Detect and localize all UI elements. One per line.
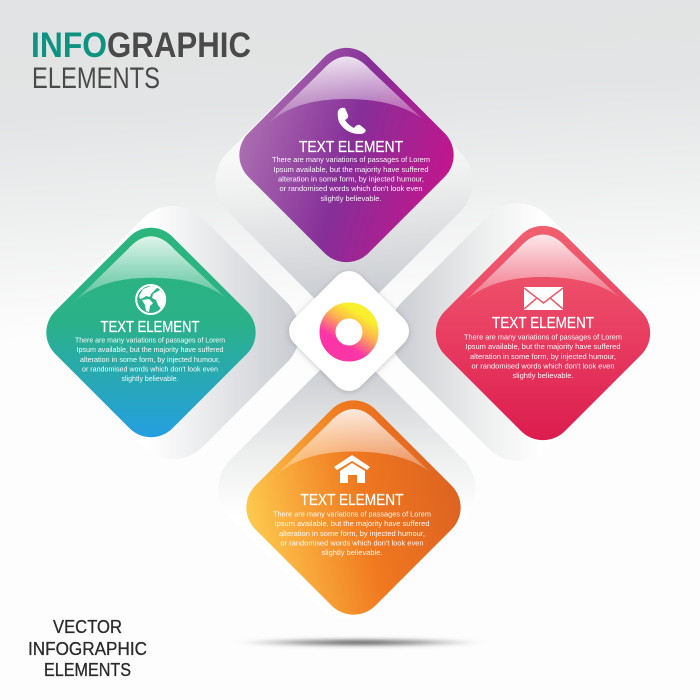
- icon: phone: [338, 108, 366, 134]
- panel: green globe card: alteration in some form, by injected humour,: [80, 357, 220, 364]
- panel: orange home card: or randomised words which don't look even: [280, 540, 424, 548]
- icon: globe: [136, 285, 165, 314]
- caption: vector infographic elements: ELEMENTS: [44, 660, 131, 680]
- panel: green globe card: or randomised words which don't look even: [82, 366, 218, 374]
- panel: orange home card: Ipsum available, but the majority have suffered: [274, 521, 430, 528]
- panel: top backing: [215, 53, 473, 311]
- panel: orange home card: [246, 400, 461, 615]
- caption: vector infographic elements: INFOGRAPHIC: [28, 639, 147, 659]
- icon: gradient ring: [328, 310, 370, 354]
- panel: orange home card: There are many variations of passages of Lorem: [273, 512, 431, 518]
- caption: vector infographic elements: VECTOR: [53, 617, 122, 637]
- panel: green globe card: TEXT ELEMENT: [100, 319, 200, 336]
- panel: purple phone card: TEXT ELEMENT: [299, 139, 403, 156]
- panel: red mail card: TEXT ELEMENT: [492, 315, 594, 332]
- panel: purple phone card: [239, 48, 454, 262]
- panel: left backing: [46, 206, 300, 459]
- icon: envelope: [524, 287, 563, 310]
- panel: green globe card: Ipsum available, but the majority have suffered: [76, 347, 224, 354]
- title: ELEMENTS: [32, 62, 160, 95]
- panel: purple phone card: There are many variations of passages of Lorem: [272, 157, 430, 164]
- panel: orange home card: slightly believable.: [322, 550, 383, 557]
- panel: green globe card: slightly believable.: [122, 376, 179, 383]
- panel: purple phone card: slightly believable.: [320, 196, 382, 203]
- panel: purple phone card: Ipsum available, but the majority have suffered: [274, 167, 429, 174]
- panel: orange home card: alteration in some form, by injected humour,: [279, 531, 425, 538]
- panel: bottom backing: [218, 360, 476, 618]
- panel: orange home card: TEXT ELEMENT: [300, 492, 404, 509]
- icon: house: [334, 455, 370, 483]
- panel: red mail card: or randomised words which don't look even: [472, 364, 615, 370]
- panel: green globe card: There are many variations of passages of Lorem: [75, 338, 225, 344]
- panel: center tile: [289, 271, 409, 391]
- title: GRAPHIC: [107, 26, 251, 65]
- panel: red mail card: Ipsum available, but the majority have suffered: [466, 344, 621, 351]
- panel: right backing: [389, 203, 647, 461]
- panel: green globe card: [46, 228, 256, 437]
- caption: vector infographic elements: [28, 617, 147, 680]
- panel: red mail card: slightly believable.: [512, 373, 574, 380]
- panel: red mail card: alteration in some form, by injected humour,: [470, 354, 616, 361]
- floor shadow: [235, 638, 485, 647]
- panel: purple phone card: alteration in some form, by injected humour,: [278, 176, 424, 184]
- panel: red mail card: [436, 226, 650, 440]
- title: [31, 26, 251, 95]
- panel: red mail card: There are many variations of passages of Lorem: [464, 334, 622, 342]
- title: INFO: [31, 26, 107, 65]
- panel: purple phone card: or randomised words which don't look even: [280, 186, 423, 193]
